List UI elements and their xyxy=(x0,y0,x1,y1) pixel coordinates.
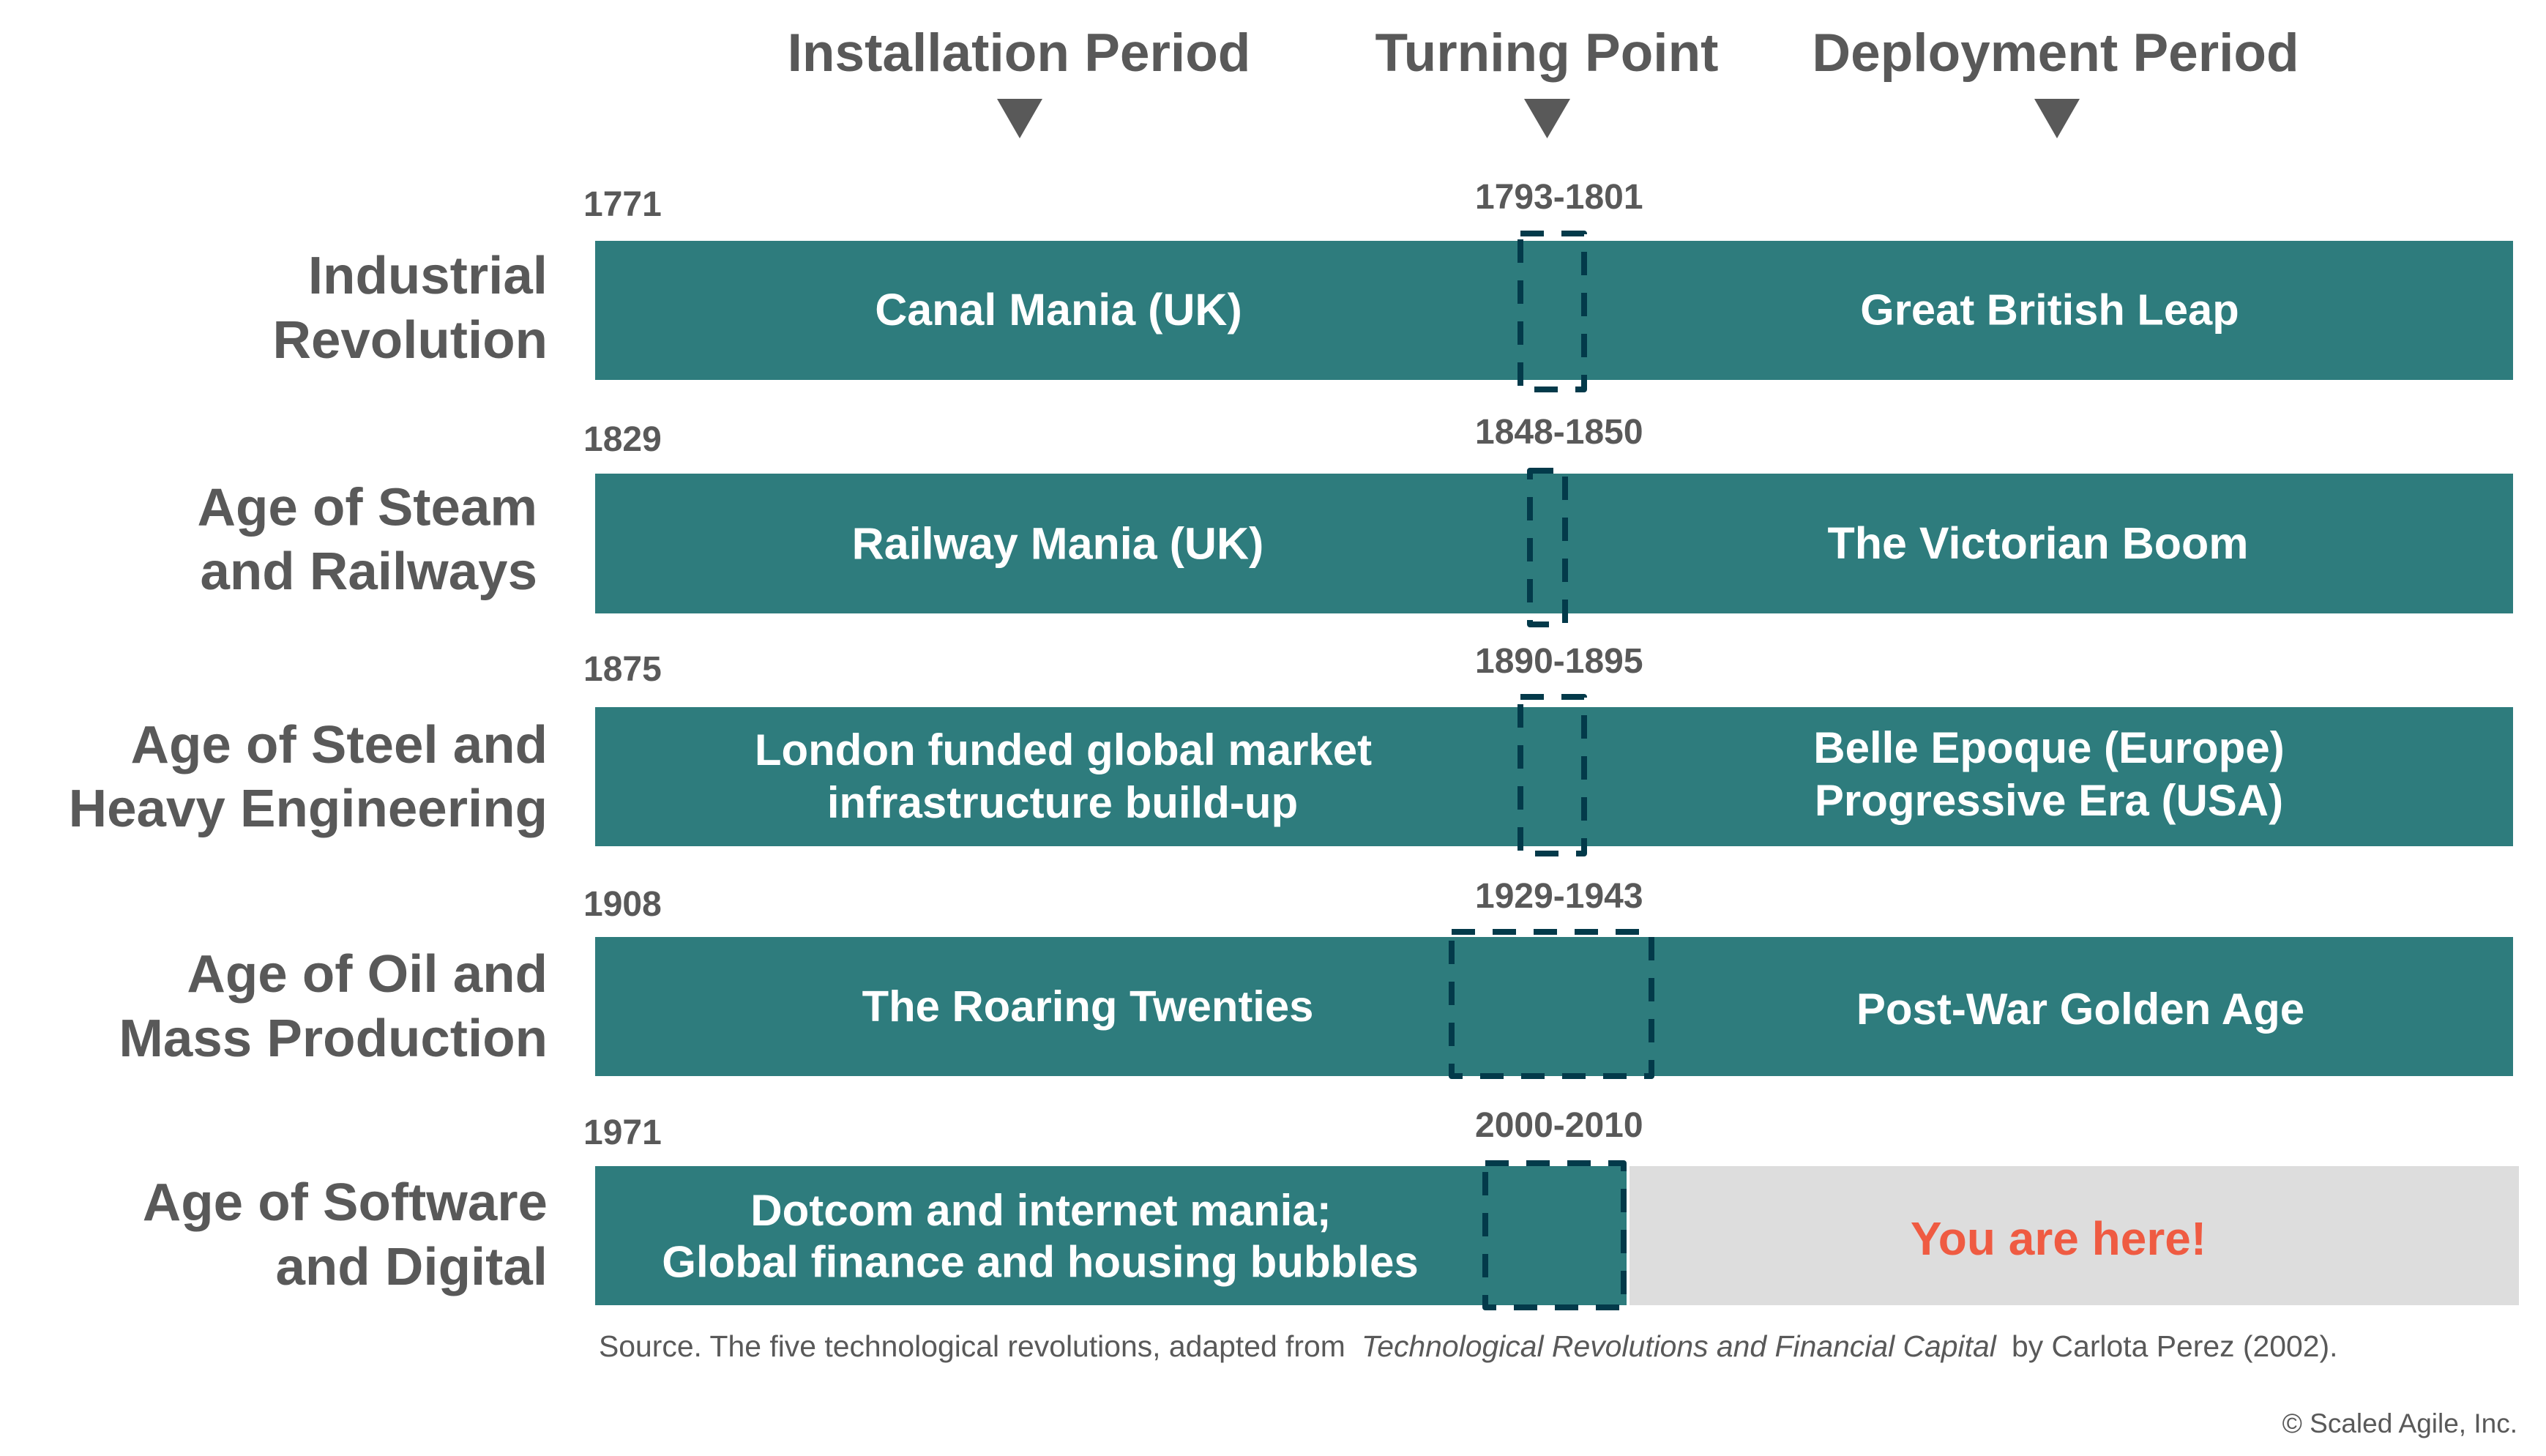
label: Age of Oil and Mass Production: Mass Production xyxy=(119,1009,548,1068)
row: Age of Oil and Mass Production xyxy=(119,877,2513,1076)
source note: Source. The five technological revolutions, adapted from xyxy=(599,1329,1345,1363)
bar: Steel and Heavy Engineering xyxy=(595,707,2513,846)
deployment text: Post-War Golden Age: Post-War Golden Age xyxy=(1856,985,2304,1034)
heading: Installation Period xyxy=(788,23,1250,138)
installation text: Canal Mania: Canal Mania (UK) xyxy=(875,285,1242,335)
turning years 1929-1943: 1929-1943 xyxy=(1475,877,1643,916)
turning point dashed box xyxy=(1485,1163,1624,1307)
copyright: © Scaled Agile, Inc. xyxy=(2282,1408,2517,1438)
label: Industrial Revolution: Industrial xyxy=(308,246,548,305)
label: Industrial Revolution: Revolution xyxy=(272,310,548,370)
turning point dashed box xyxy=(1530,471,1565,624)
heading: Deployment Period xyxy=(1812,23,2299,138)
start year 1875: 1875 xyxy=(583,650,662,689)
row: Age of Software and Digital xyxy=(143,1106,2519,1307)
arrow: deployment xyxy=(2034,99,2080,138)
grey bar: future deployment xyxy=(1629,1166,2519,1305)
bar: Software and Digital xyxy=(595,1166,1627,1305)
turning point dashed box xyxy=(1520,697,1584,854)
label: Age of Steam and Railways: and Railways xyxy=(200,542,537,601)
turning point dashed box xyxy=(1520,234,1584,389)
label: Age of Steel and Heavy Engineering: Heavy Engineering xyxy=(69,779,548,838)
heading: Turning Point xyxy=(1375,23,1718,138)
heading: Turning Point: Turning Point xyxy=(1375,23,1718,83)
heading: Deployment Period: Deployment Period xyxy=(1812,23,2299,83)
deployment text: Belle Epoque, Progressive Era: Progressive Era (USA) xyxy=(1815,776,2283,825)
deployment text: Great British Leap: Great British Leap xyxy=(1860,285,2239,334)
installation text: London funded: London funded global market xyxy=(755,725,1372,774)
row: Age of Steel and Heavy Engineering xyxy=(69,642,2513,854)
label: Age of Software and Digital: Age of Software xyxy=(143,1173,548,1232)
start year 1771: 1771 xyxy=(583,185,662,224)
arrow: turning point xyxy=(1524,99,1570,138)
start year 1829: 1829 xyxy=(583,420,662,459)
start year 1908: 1908 xyxy=(583,885,662,924)
row: Age of Steam and Railways xyxy=(198,413,2513,624)
installation text: Dotcom: Global finance and housing bubbles xyxy=(662,1237,1419,1287)
turning years 2000-2010: 2000-2010 xyxy=(1475,1106,1643,1145)
installation text: Dotcom: Dotcom and internet mania; xyxy=(750,1186,1332,1235)
source note: by Carlota Perez (2002). xyxy=(2012,1329,2337,1363)
bar: Industrial Revolution xyxy=(595,241,2513,380)
bar: Oil and Mass Production xyxy=(595,937,2513,1076)
label: Age of Steam and Railways: Age of Steam xyxy=(198,477,537,537)
label: Age of Steel and Heavy Engineering: Age of Steel and xyxy=(131,715,548,774)
label: Age of Software and Digital: and Digital xyxy=(275,1237,548,1296)
bar: Steam and Railways xyxy=(595,474,2513,613)
installation text: Railway Mania: Railway Mania (UK) xyxy=(852,518,1263,568)
arrow: installation xyxy=(997,99,1042,138)
label: Age of Oil and Mass Production: Age of Oil and xyxy=(187,944,548,1004)
row: Industrial Revolution xyxy=(272,178,2513,389)
deployment text: The Victorian Boom: The Victorian Boom xyxy=(1827,518,2249,568)
turning years 1793-1801: 1793-1801 xyxy=(1475,178,1643,217)
callout: You are here: You are here! xyxy=(1911,1212,2206,1265)
turning years 1890-1895: 1890-1895 xyxy=(1475,642,1643,681)
turning years 1848-1850: 1848-1850 xyxy=(1475,413,1643,452)
turning point dashed box xyxy=(1452,932,1651,1076)
installation text: The Roaring Twenties: The Roaring Twenties xyxy=(862,982,1313,1031)
source note: Technological Revolutions and Financial Capital xyxy=(1362,1329,1997,1363)
installation text: London funded: infrastructure build-up xyxy=(827,778,1298,827)
heading: Installation Period: Installation Period xyxy=(788,23,1250,83)
deployment text: Belle Epoque, Progressive Era: Belle Epoque (Europe) xyxy=(1813,723,2285,772)
start year 1971: 1971 xyxy=(583,1113,662,1152)
